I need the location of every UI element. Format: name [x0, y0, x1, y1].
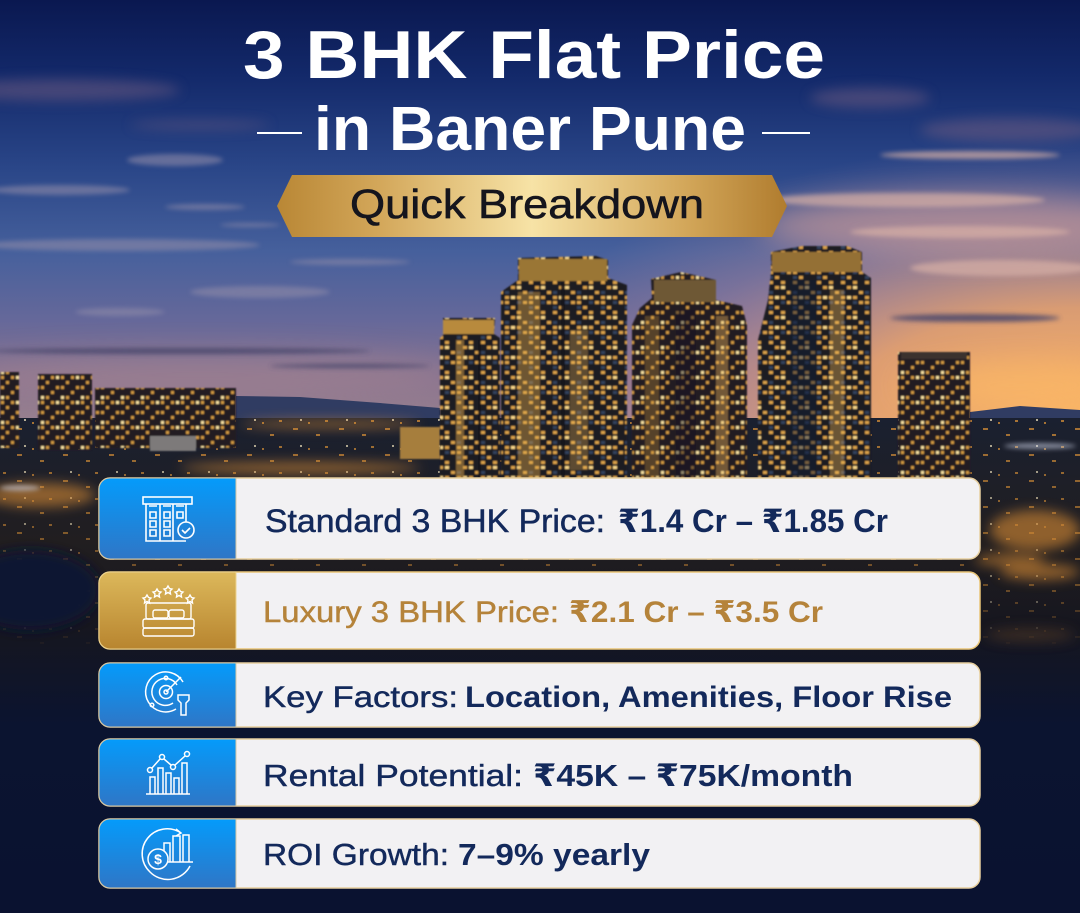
card: ROI growth: ROI Growth:	[263, 837, 449, 872]
title	[243, 17, 825, 164]
icon: building with check	[143, 497, 194, 541]
badge: quick breakdown: Quick Breakdown	[350, 181, 704, 227]
card: luxury price: ₹2.1 Cr – ₹3.5 Cr	[569, 596, 823, 629]
card: key factors: Location, Amenities, Floor Rise	[465, 681, 952, 714]
card: rental potential: Rental Potential:	[263, 758, 523, 793]
badge: quick breakdown	[277, 175, 787, 237]
title: in Baner Pune	[314, 95, 746, 164]
background: ground and water with city lights	[0, 412, 1080, 678]
card: rental potential	[99, 739, 980, 806]
icon: coin, bars and circular arrow	[142, 829, 193, 879]
card: key factors	[99, 663, 980, 727]
card: ROI growth: 7–9% yearly	[458, 837, 651, 872]
card: standard price: ₹1.4 Cr – ₹1.85 Cr	[618, 503, 888, 539]
tower 3	[632, 272, 747, 478]
icon: bar chart with trend line	[146, 752, 190, 794]
background: dusk sky	[0, 0, 1080, 420]
card: standard price	[99, 478, 980, 559]
icon: coin, bars and circular arrow: $	[154, 851, 162, 867]
title: 3 BHK Flat Price	[243, 17, 825, 93]
card: luxury price: Luxury 3 BHK Price:	[263, 596, 559, 629]
icon: radar with key	[146, 672, 189, 715]
card: luxury price	[99, 572, 980, 649]
tower 4	[758, 246, 871, 478]
background: distant hills	[236, 396, 1080, 430]
card: key factors: Key Factors:	[263, 681, 458, 714]
card: standard price: Standard 3 BHK Price:	[265, 503, 605, 539]
left skyline buildings	[0, 372, 440, 459]
tower 2	[501, 256, 627, 478]
tower 5	[898, 352, 970, 478]
card: ROI growth	[99, 819, 980, 888]
icon: bed with stars	[143, 586, 194, 636]
card: rental potential: ₹45K – ₹75K/month	[533, 758, 853, 793]
tower 1	[440, 318, 500, 478]
